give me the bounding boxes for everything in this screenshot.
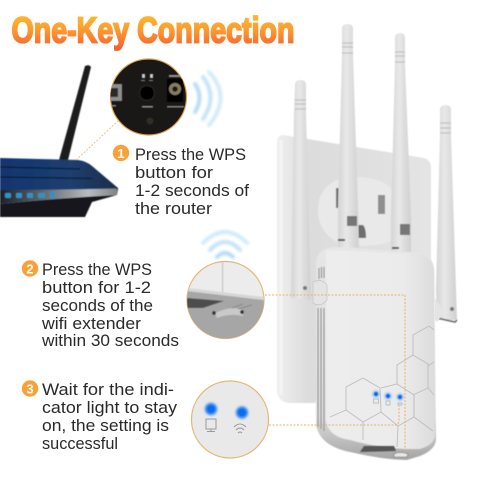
badge 2: 2: [26, 262, 34, 276]
step 1 text: the router: [135, 200, 213, 218]
badge 2: [22, 260, 38, 277]
wall outlet plate: [277, 135, 431, 403]
title: One-Key Connection: [12, 10, 294, 50]
hexagon pattern: [330, 326, 434, 447]
wifi extender body: [313, 247, 444, 460]
router illustration: [0, 65, 118, 217]
side vents: [318, 267, 324, 431]
indicator lights: [373, 391, 403, 405]
antenna: far right: [436, 105, 457, 322]
connector: router to port detail: [76, 121, 118, 160]
step 3: [22, 380, 178, 453]
antenna: far left: [291, 80, 311, 300]
connector: light detail to indicators: [269, 404, 399, 425]
step 1 text: [135, 146, 249, 218]
antenna: centre left: [338, 24, 359, 250]
indicator light detail circle: [192, 381, 268, 458]
step 1 text: button for: [135, 164, 214, 182]
step 2 text: wifi extender: [41, 315, 142, 333]
step 1 text: 1-2 seconds of: [135, 182, 249, 200]
step 3 text: Wait for the indi-: [42, 381, 174, 399]
antennas: [291, 24, 457, 322]
step 3 text: [42, 381, 178, 453]
connector: WPS detail to button: [265, 295, 405, 453]
badge 3: [22, 380, 38, 397]
step 2 text: within 30 seconds: [41, 332, 179, 350]
step 2: [22, 260, 179, 350]
step 3 text: cator light to stay: [42, 399, 178, 417]
step 3 text: on, the setting is: [42, 417, 169, 435]
router port detail circle: [110, 59, 186, 135]
step 2 text: button for 1-2: [42, 279, 151, 297]
extender WPS button detail circle: [187, 262, 264, 340]
badge 1: 1: [117, 146, 125, 161]
icon: wifi signal from router: [195, 72, 220, 125]
step 2 text: [41, 261, 179, 350]
hinge: [313, 281, 327, 305]
port and button: [360, 446, 408, 457]
step 1: [113, 145, 249, 218]
step 2 text: seconds of the: [42, 297, 153, 315]
right hinge: [435, 298, 444, 322]
step 3 text: successful: [42, 435, 118, 453]
antenna: centre right: [391, 33, 411, 252]
step 1 text: Press the WPS: [135, 146, 246, 164]
badge 3: 3: [26, 382, 34, 396]
icon: wifi signal from extender: [203, 232, 247, 257]
step 2 text: Press the WPS: [42, 261, 152, 279]
